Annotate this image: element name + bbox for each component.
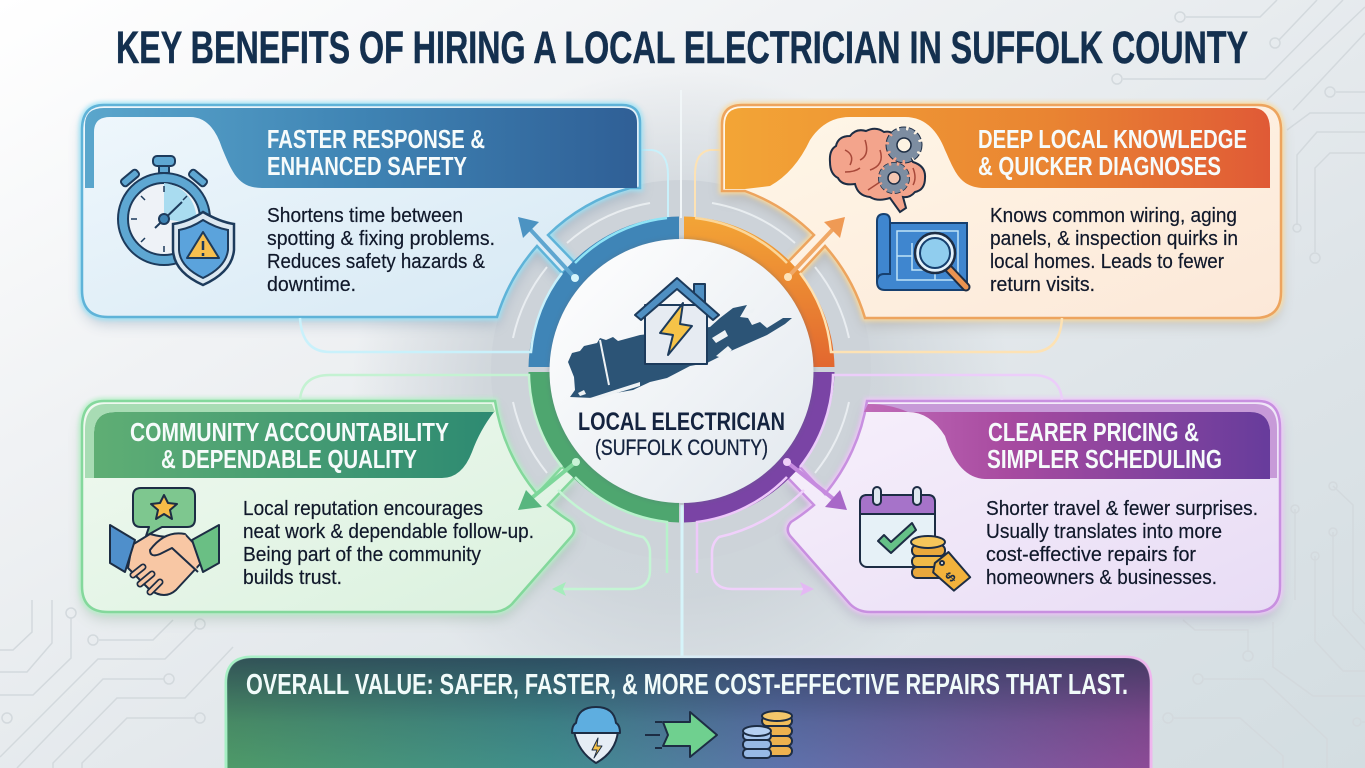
panel: overall value: [226, 657, 1151, 768]
arrow: to pricing: [783, 458, 847, 510]
map: Long Island: [568, 305, 792, 398]
heading: DEEP LOCAL KNOWLEDGE: [978, 126, 1247, 154]
body text: homeowners & businesses.: [986, 566, 1217, 589]
panel: faster response: [82, 105, 640, 324]
body text: Usually translates into more: [986, 520, 1222, 543]
body text: Shorter travel & fewer surprises.: [986, 497, 1258, 520]
heading: SIMPLER SCHEDULING: [987, 446, 1222, 474]
body text: panels, & inspection quirks in: [990, 227, 1238, 250]
body text: Reduces safety hazards &: [267, 250, 485, 273]
heading: & DEPENDABLE QUALITY: [161, 446, 417, 474]
panel: clearer pricing: [787, 401, 1280, 619]
arrow: to community: [518, 458, 580, 510]
hub label: LOCAL ELECTRICIAN: [578, 408, 785, 436]
heading: [987, 419, 1222, 474]
icon: arrow: [645, 712, 717, 757]
header band: [94, 412, 494, 478]
icon: calendar, coins and price tag: [860, 487, 972, 593]
body text: Knows common wiring, aging: [990, 204, 1237, 227]
heading: COMMUNITY ACCOUNTABILITY: [130, 419, 449, 447]
body text: spotting & fixing problems.: [267, 227, 495, 250]
icon: coin stacks: [743, 711, 792, 758]
connector lines and band outlines: [300, 218, 1062, 658]
body text: cost-effective repairs for: [986, 543, 1196, 566]
body text: neat work & dependable follow-up.: [243, 520, 534, 543]
grey hub shading: [351, 70, 1011, 730]
body text: Being part of the community: [243, 543, 482, 566]
heading: & QUICKER DIAGNOSES: [978, 153, 1221, 181]
heading: [130, 419, 449, 474]
body text: [267, 204, 495, 296]
hub label: (SUFFOLK COUNTY): [595, 435, 768, 460]
hub label: [578, 408, 785, 460]
icon label: price symbol: $: [942, 569, 959, 585]
body text: return visits.: [990, 273, 1095, 296]
header band: [85, 108, 637, 188]
icon: handshake and star bubble: [110, 488, 219, 595]
heading: CLEARER PRICING &: [988, 419, 1199, 447]
header band: [725, 108, 1270, 189]
icon: brain with gears: [830, 129, 925, 212]
body text: builds trust.: [243, 566, 342, 589]
header band: [870, 404, 1277, 478]
body text: Shortens time between: [267, 204, 463, 227]
arrow: to faster response: [518, 217, 579, 282]
panel: community accountability: [82, 401, 575, 619]
body text: [243, 497, 534, 589]
icon: stopwatch and shield: [118, 156, 234, 285]
heading: [978, 126, 1247, 181]
panel: deep local knowledge: [722, 105, 1281, 325]
top connector lines: [640, 90, 722, 218]
icon: helmet: [572, 707, 620, 763]
heading: ENHANCED SAFETY: [267, 153, 467, 181]
body text: local homes. Leads to fewer: [990, 250, 1224, 273]
body text: [986, 497, 1258, 589]
heading: FASTER RESPONSE &: [267, 126, 485, 154]
heading: [267, 126, 485, 181]
body text: Local reputation encourages: [243, 497, 483, 520]
body text: [990, 204, 1238, 296]
body text: downtime.: [267, 273, 356, 296]
hub: local electrician: [548, 238, 814, 504]
icon: house with bolt: [635, 278, 719, 364]
arrow: to local knowledge: [784, 217, 845, 281]
hub ring: [528, 216, 834, 522]
icon: blueprint and magnifier: [877, 214, 967, 290]
